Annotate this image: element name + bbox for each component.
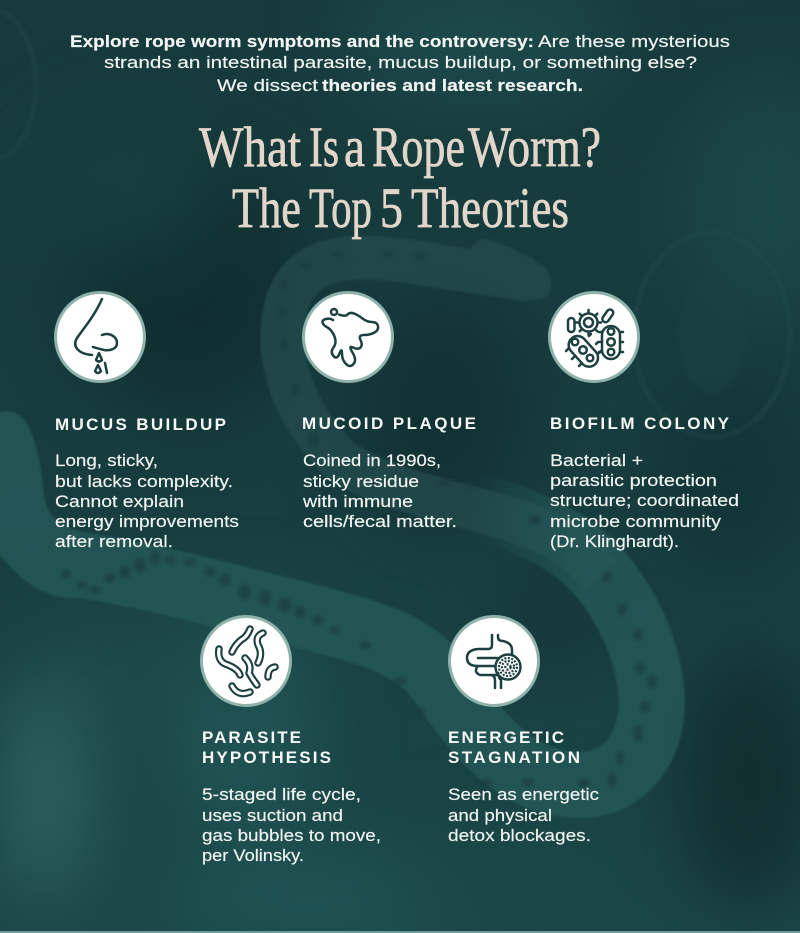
description: Bacterial + — [550, 451, 643, 470]
title: Top — [309, 177, 372, 240]
description: but lacks complexity. — [55, 472, 233, 491]
heading: MUCOID PLAQUE — [302, 414, 476, 433]
background: rope worm — [0, 239, 657, 788]
description: (Dr. Klinghardt). — [550, 532, 679, 551]
icon: microbes — [550, 292, 638, 382]
intro text — [70, 32, 730, 95]
description: Long, sticky, — [55, 451, 158, 470]
heading — [448, 728, 580, 767]
description: microbe community — [550, 512, 722, 531]
intro text: strands an intestinal parasite, mucus buildup, or something else? — [104, 53, 697, 72]
description: after removal. — [55, 532, 173, 551]
theory: energetic stagnation — [448, 616, 600, 845]
description — [550, 451, 739, 551]
description — [55, 451, 239, 551]
description: detox blockages. — [448, 826, 591, 845]
description — [302, 451, 457, 531]
bottom edge line — [0, 931, 800, 933]
description: sticky residue — [303, 472, 419, 491]
description: energy improvements — [55, 512, 239, 531]
intro text: Explore rope worm symptoms and the controversy: — [70, 32, 534, 51]
theory: mucus buildup — [55, 292, 239, 551]
heading: MUCUS BUILDUP — [55, 415, 226, 434]
description: 5-staged life cycle, — [202, 785, 361, 804]
description — [202, 785, 381, 865]
background: cell rings — [0, 10, 790, 437]
heading: PARASITE — [202, 728, 301, 747]
description: Seen as energetic — [448, 785, 600, 804]
title: 5 — [380, 177, 403, 240]
title: Is — [309, 116, 339, 179]
description: Cannot explain — [55, 492, 184, 511]
heading — [202, 728, 331, 767]
icon: intestine with magnified circle — [450, 616, 538, 706]
description: gas bubbles to move, — [202, 826, 381, 845]
heading: ENERGETIC — [448, 728, 564, 747]
icon: mucus blob — [304, 292, 392, 382]
icon: worms — [202, 616, 290, 706]
intro text: theories and latest research. — [322, 76, 583, 95]
title: The — [232, 177, 301, 240]
heading: BIOFILM COLONY — [550, 414, 730, 433]
title: Rope — [372, 116, 465, 179]
description: and physical — [448, 806, 552, 825]
worm spots — [61, 250, 657, 788]
title: Worm? — [468, 116, 601, 179]
theory: mucoid plaque — [302, 292, 476, 531]
heading: STAGNATION — [448, 748, 580, 767]
icon: nose with drip — [56, 292, 144, 382]
theory: biofilm colony — [550, 292, 739, 551]
description: structure; coordinated — [550, 491, 739, 510]
title: a — [344, 116, 365, 179]
description: parasitic protection — [550, 471, 717, 490]
description: uses suction and — [202, 806, 343, 825]
description: Coined in 1990s, — [303, 451, 441, 470]
description: cells/fecal matter. — [303, 512, 457, 531]
title: What — [199, 116, 301, 179]
description — [448, 785, 600, 845]
theory: parasite hypothesis — [202, 616, 381, 865]
title: Theories — [411, 177, 569, 240]
description: with immune — [302, 492, 413, 511]
description: per Volinsky. — [202, 846, 304, 865]
title — [199, 116, 601, 240]
intro text: We dissect — [217, 76, 318, 95]
heading: HYPOTHESIS — [202, 748, 331, 767]
intro text: Are these mysterious — [538, 32, 730, 51]
